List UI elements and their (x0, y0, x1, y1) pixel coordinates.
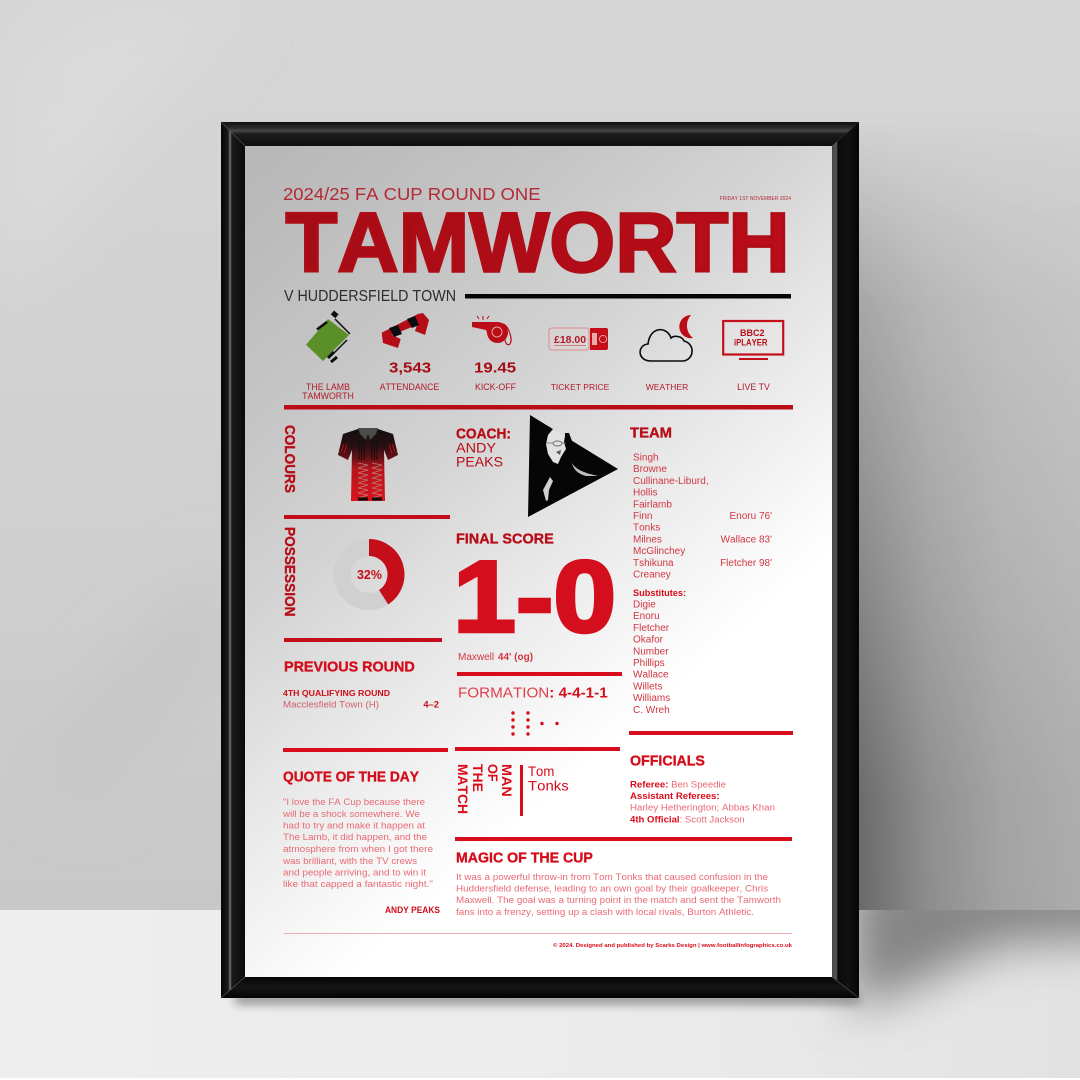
substitutes list: Okafor (633, 635, 664, 646)
story text (456, 872, 781, 918)
officials list: Assistant Referees: (630, 791, 720, 802)
heading: magic: MAGIC OF THE CUP (456, 850, 593, 867)
heading: quote: QUOTE OF THE DAY (283, 769, 419, 786)
footer credit: © 2024. Designed and published by Scarks Design | www.footballinfographics.co.uk (553, 942, 793, 949)
starting eleven: Tonks (633, 523, 660, 534)
starting eleven: Creaney (633, 570, 671, 580)
goalscorer: Maxwell 44' (og) (458, 652, 533, 663)
starting eleven: Cullinane-Liburd, (633, 476, 709, 487)
substitutes list: Phillips (633, 658, 665, 669)
starting eleven: Tshikuna (633, 558, 674, 569)
header: season and round: 2024/25 FA CUP ROUND ONE (283, 184, 541, 204)
officials list: Referee: Ben Speedie (630, 780, 726, 790)
divider rules (283, 405, 793, 841)
quote text: had to try and make it happen at (283, 820, 425, 832)
story text: Huddersfield defense, leading to an own goal by their goalkeeper, Chris (456, 884, 768, 894)
heading: final score: FINAL SCORE (456, 531, 554, 548)
title: Tamworth: TAMWORTH (286, 196, 790, 289)
fact labels (302, 382, 770, 401)
substitutions (720, 511, 772, 569)
coach name: PEAKS (456, 454, 503, 469)
fact labels: WEATHER (646, 382, 688, 392)
substitutes list: Number (633, 646, 669, 657)
panel: final score (453, 531, 616, 663)
header: match date: FRIDAY 1ST NOVEMBER 2024 (720, 196, 791, 202)
panel: colours (282, 425, 398, 501)
story text: It was a powerful throw-in from Tom Tonks that caused confusion in the (456, 872, 768, 883)
subtitle: opponent: V HUDDERSFIELD TOWN (284, 289, 456, 305)
poster paper (245, 146, 832, 977)
panel: officials (630, 753, 775, 826)
quote text: The Lamb, it did happen, and the (283, 832, 427, 843)
panel: match facts (302, 311, 783, 401)
fact labels: ATTENDANCE (380, 382, 439, 392)
coach name: ANDY (456, 441, 497, 456)
icon: stadium pitch (306, 311, 350, 362)
footer rule (284, 933, 792, 934)
starting eleven (633, 452, 709, 580)
panel: formation (458, 686, 608, 736)
fact labels: THE LAMB (306, 382, 350, 392)
vertical label: THE (470, 764, 486, 792)
starting eleven: Browne (633, 464, 667, 475)
attendance figure: 3,543 (389, 360, 431, 376)
substitutes list (633, 588, 686, 716)
subtitle rule (465, 294, 791, 298)
icon: television: BBC2 (740, 328, 765, 338)
coach name (456, 426, 511, 469)
vertical label (455, 764, 514, 814)
starting eleven: Hollis (633, 488, 657, 499)
starting eleven: Singh (633, 452, 659, 464)
substitutes list: Fletcher (633, 623, 670, 634)
score figures: 1-0 (453, 540, 616, 653)
quote attribution: ANDY PEAKS (385, 905, 440, 915)
quote text: "I love the FA Cup because there (283, 797, 425, 808)
fact labels: KICK-OFF (475, 382, 517, 392)
substitutes list: Wallace (633, 670, 669, 681)
fact labels: LIVE TV (737, 382, 770, 392)
substitutes list: Substitutes: (633, 588, 686, 598)
substitutions: Enoru 76' (730, 511, 772, 522)
panel: man of the match (455, 764, 569, 816)
fact labels: TAMWORTH (302, 391, 354, 401)
icon: television (723, 321, 783, 360)
icon: cloud and moon (640, 315, 693, 361)
substitutes list: Willets (633, 681, 662, 692)
story text: fans into a frenzy, setting up a clash with local rivals, Burton Athletic. (456, 907, 754, 918)
quote text: like that capped a fantastic night." (283, 879, 433, 890)
formation heading: FORMATION: 4-4-1-1 (458, 686, 608, 701)
substitutes list: Enoru (633, 611, 660, 622)
substitutes list: Digie (633, 600, 656, 610)
substitutions: Wallace 83' (721, 534, 772, 545)
player name: Tonks (528, 779, 569, 794)
panel: coach (456, 415, 618, 517)
vertical heading: possession: POSSESSION (282, 527, 298, 617)
previous round result: 4–2 (423, 698, 439, 710)
starting eleven: Milnes (633, 534, 662, 545)
kick-off figure: 19.45 (474, 360, 516, 376)
substitutions: Fletcher 98' (720, 558, 772, 569)
panel: magic of the cup (456, 850, 781, 918)
previous round result (283, 688, 439, 710)
previous round result: 4TH QUALIFYING ROUND (283, 688, 390, 698)
picture frame (221, 122, 859, 998)
quote text: atmosphere from when I got there (283, 844, 433, 855)
officials list: 4th Official: Scott Jackson (630, 814, 745, 826)
substitutes list: Williams (633, 693, 670, 704)
vertical label: OF (485, 764, 501, 782)
vertical label: MAN (498, 764, 514, 797)
officials list (630, 780, 775, 826)
player name: Tom (528, 764, 554, 779)
player name (528, 764, 569, 794)
icon: ticket (549, 328, 608, 350)
starting eleven: Finn (633, 511, 652, 522)
quote text: and people arriving, and to win it (283, 868, 426, 878)
starting eleven: Fairlamb (633, 499, 672, 510)
vertical heading: colours: COLOURS (282, 425, 298, 493)
panel: team (630, 426, 772, 716)
previous round result: Macclesfield Town (H) (283, 700, 379, 710)
heading: team: TEAM (630, 426, 672, 441)
vertical bar (520, 765, 523, 816)
quote text: will be a shock somewhere. We (282, 809, 420, 820)
starting eleven: McGlinchey (633, 546, 685, 557)
donut chart: 32% (357, 568, 382, 582)
icon: whistle (472, 316, 511, 345)
vertical label: MATCH (455, 764, 471, 814)
substitutes list: C. Wreh (633, 705, 670, 716)
coach name: COACH: (456, 426, 511, 443)
heading: officials: OFFICIALS (630, 753, 705, 770)
panel: quote of the day (282, 769, 440, 915)
panel: possession (282, 527, 396, 617)
story text: Maxwell. The goal was a turning point in the match and sent the Tamworth (456, 895, 781, 906)
icon: ticket: £18.00 (554, 334, 586, 346)
coach portrait (528, 415, 618, 517)
heading: previous round: PREVIOUS ROUND (284, 659, 415, 676)
officials list: Harley Hetherington; Abbas Khan (630, 802, 775, 814)
fact labels: TICKET PRICE (551, 382, 610, 392)
quote text: was brilliant, with the TV crews (282, 856, 417, 867)
icon: scarf (382, 313, 429, 348)
panel: previous round (283, 659, 439, 710)
kit: shirt (338, 428, 398, 501)
icon: television: iPLAYER (734, 337, 767, 348)
quote text (282, 797, 433, 890)
formation dots (511, 711, 559, 736)
